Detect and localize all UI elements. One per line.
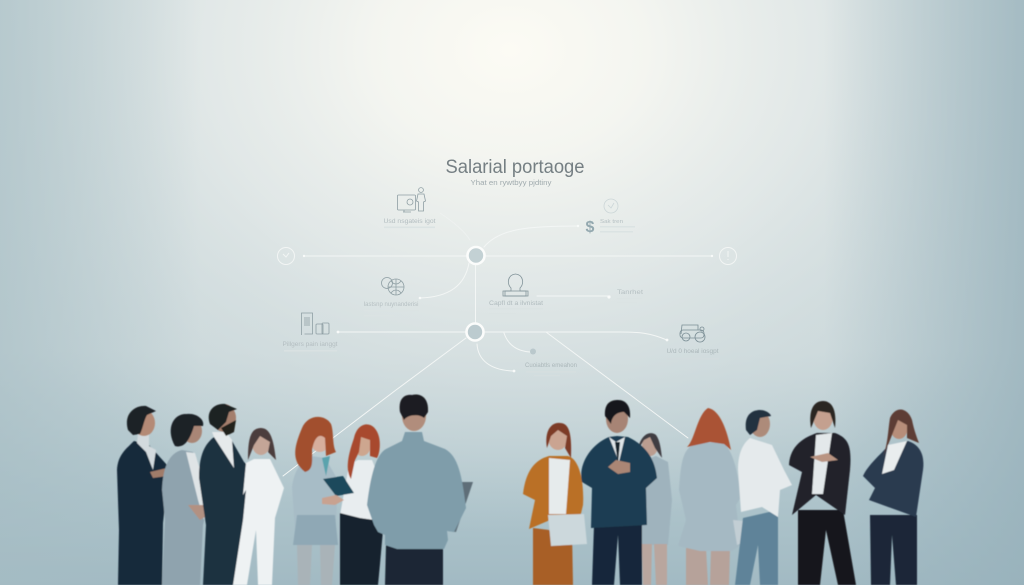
item: presenter at screen — [384, 188, 436, 228]
caption — [667, 358, 719, 360]
caption — [489, 308, 543, 314]
title: Salarial portaoge — [446, 157, 584, 178]
label: Cuoiabtls emeahon — [525, 363, 577, 369]
icon: right end circle — [720, 248, 736, 264]
item: dollar — [586, 199, 635, 236]
icon: stamp — [503, 274, 528, 296]
person: man in dark suit, far left — [117, 406, 168, 585]
person: woman in grey behind — [638, 433, 672, 585]
network connector lines — [283, 213, 712, 476]
item: central note — [525, 348, 577, 376]
person: red-haired woman in light blue — [292, 417, 338, 585]
label: U/d 0 hoeal iosgpt — [666, 349, 719, 355]
icon: small dot — [530, 348, 536, 354]
person: man in white jacket and jeans — [735, 410, 792, 585]
person: woman in grey suit — [162, 414, 208, 585]
caption — [284, 350, 337, 352]
label: Iastsnp nuynanderisi — [364, 302, 418, 308]
icon: vehicle — [680, 325, 705, 342]
item: documents — [282, 313, 338, 352]
caption — [600, 226, 635, 232]
person: man from behind in blue shirt — [367, 395, 466, 585]
caption — [617, 298, 642, 303]
label: Pillgers pain ianggt — [282, 342, 338, 348]
node: lower hub — [466, 324, 484, 340]
icon: documents — [302, 313, 329, 335]
label: Sak tren — [600, 219, 623, 225]
person: man in black jacket with long hair — [789, 401, 856, 585]
icon: dollar sign: $ — [586, 219, 595, 236]
person: man in navy suit with phone — [581, 400, 657, 585]
icon: tablet held by woman — [323, 476, 354, 496]
person: woman in dark blazer, far right — [863, 410, 923, 585]
caption — [384, 226, 435, 228]
person: woman in white suit — [233, 428, 284, 585]
hands on tablet — [322, 495, 344, 505]
person: red-haired woman in white blouse — [340, 424, 384, 585]
node: upper hub — [468, 247, 484, 264]
item: vehicle — [666, 325, 719, 360]
label: Usd nsgateis igot — [384, 219, 436, 225]
label: Capfl dt a ilvnistat — [489, 301, 543, 307]
handbag — [733, 520, 749, 545]
paper held — [548, 514, 587, 546]
item: stamp — [489, 274, 543, 314]
label: Tanrhet — [617, 290, 643, 296]
person: woman in orange suit — [523, 423, 587, 585]
item: globe — [364, 278, 419, 316]
people group — [117, 395, 923, 585]
icon: monitor and person — [398, 188, 426, 212]
item: tanhet — [617, 290, 643, 303]
icon: coin — [604, 199, 618, 213]
connector end dots — [303, 225, 713, 372]
person: bearded man in dark suit — [199, 404, 257, 585]
caption — [526, 371, 576, 376]
icon: left end circle — [278, 248, 294, 264]
person: red-haired woman from behind — [678, 408, 749, 585]
item: laptop behind man — [441, 482, 473, 532]
subtitle: Yhat en rywtbyy pjdtiny — [470, 178, 552, 187]
icon: globe — [382, 278, 404, 295]
caption — [364, 310, 419, 316]
